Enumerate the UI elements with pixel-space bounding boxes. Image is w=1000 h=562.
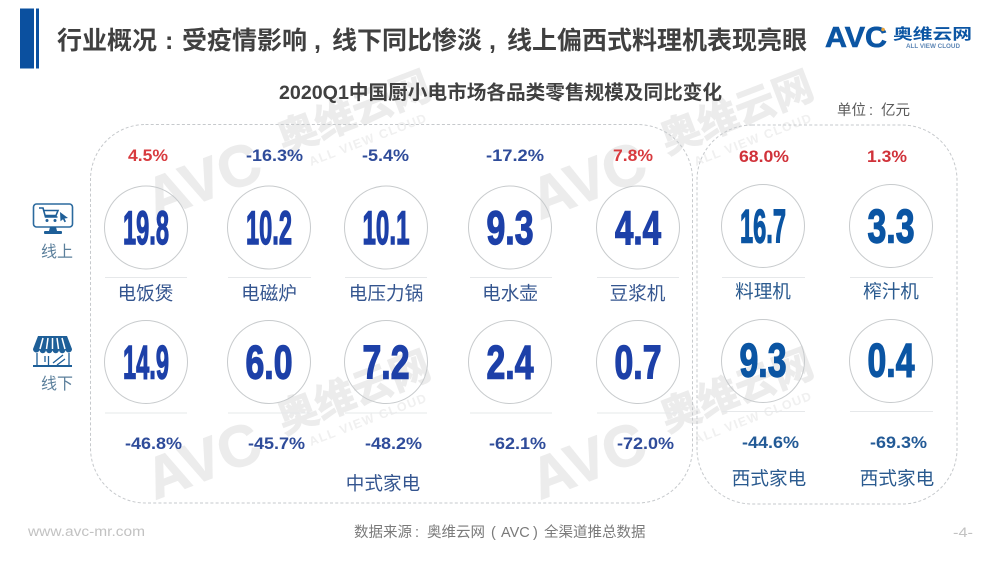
offline value: 电饭煲 <box>104 320 188 404</box>
offline value: 电水壶 <box>468 320 552 404</box>
online value: 豆浆机: 4.4 <box>615 202 661 255</box>
online value: 电水壶 <box>468 186 552 269</box>
offline growth: 电磁炉 <box>228 413 311 453</box>
category: 电压力锅: 电压力锅 <box>349 283 423 304</box>
online value: 豆浆机 <box>596 186 680 269</box>
title: : <box>165 27 173 55</box>
online value: 榨汁机: 3.3 <box>868 200 914 254</box>
logo: AVC all view cloud: 奥维云网 <box>893 25 972 43</box>
offline value: 榨汁机: 0.4 <box>868 334 915 388</box>
watermark: top right: ALL VIEW CLOUD <box>692 111 814 169</box>
logo: AVC all view cloud: AVC <box>825 22 887 54</box>
group label: chinese appliances: 中式家电 <box>346 473 420 494</box>
offline value: 电饭煲: 14.9 <box>123 336 169 390</box>
offline value: 电磁炉: 6.0 <box>246 336 292 390</box>
title accent bars <box>20 8 39 68</box>
chart title: 2020Q1中国厨小电市场各品类零售规模及同比变化 <box>279 81 722 104</box>
online growth: 电水壶: -17.2% <box>486 147 544 165</box>
unit label: 单位 <box>837 102 866 119</box>
watermark: top left: 奥维云网 <box>271 64 437 162</box>
online value: 电磁炉 <box>228 186 310 269</box>
offline growth: 电压力锅: -48.2% <box>365 435 422 453</box>
page number: -4- <box>953 524 973 540</box>
watermark: bottom left: AVC <box>136 409 270 512</box>
watermark: top left: AVC <box>136 129 270 232</box>
online value: 电饭煲 <box>104 186 188 269</box>
offline growth: 豆浆机: -72.0% <box>617 435 674 453</box>
watermark: top right: 奥维云网 <box>654 64 820 162</box>
offline growth: 电磁炉: -45.7% <box>248 435 305 453</box>
title: , <box>314 27 321 55</box>
watermark: top left <box>136 64 437 232</box>
online growth: 电饭煲: 4.5% <box>128 147 168 165</box>
offline growth: 电水壶: -62.1% <box>489 435 546 453</box>
online value: 料理机 <box>722 184 804 268</box>
offline value: 料理机: 9.3 <box>740 334 786 388</box>
offline growth: 料理机: -44.6% <box>742 434 799 452</box>
online growth: 电压力锅: -5.4% <box>362 147 409 165</box>
offline growth: 电压力锅 <box>345 413 427 453</box>
online growth: 豆浆机: 7.8% <box>613 147 653 165</box>
offline value: 电压力锅 <box>344 320 428 404</box>
offline value: 豆浆机 <box>596 320 680 404</box>
watermark: bottom left: 奥维云网 <box>271 344 437 442</box>
channel: online <box>34 204 73 261</box>
title: 受疫情影响 <box>182 27 307 55</box>
source note: 奥维云网 <box>427 524 485 541</box>
online value: 电压力锅: 10.1 <box>362 202 410 255</box>
watermark: bottom right: ALL VIEW CLOUD <box>692 389 814 447</box>
category: 电磁炉: 电磁炉 <box>241 283 297 304</box>
category: 榨汁机 <box>850 278 933 302</box>
online growth: 料理机: 68.0% <box>739 148 789 166</box>
category: 电水壶: 电水壶 <box>482 283 538 304</box>
watermark: top right: AVC <box>521 129 655 232</box>
category: 电水壶 <box>470 278 552 304</box>
label: online: 线上 <box>41 243 73 261</box>
offline value: 豆浆机: 0.7 <box>614 336 662 390</box>
logo: AVC all view cloud <box>825 22 972 54</box>
group label: 榨汁机 western appliance: 西式家电 <box>860 468 934 489</box>
category: 榨汁机: 榨汁机 <box>863 281 919 302</box>
category: 豆浆机: 豆浆机 <box>610 283 666 304</box>
watermark: bottom right: 奥维云网 <box>654 342 820 440</box>
offline growth: 榨汁机: -69.3% <box>870 434 927 452</box>
category: 料理机 <box>722 278 805 302</box>
offline value: 榨汁机 <box>850 320 932 402</box>
category: 豆浆机 <box>597 278 679 304</box>
online value: 料理机: 16.7 <box>740 200 786 254</box>
logo: AVC all view cloud: ALL VIEW CLOUD <box>906 43 960 50</box>
source note: AVC <box>501 525 530 541</box>
icon: shopping cart on monitor <box>34 204 72 234</box>
watermark: top left: ALL VIEW CLOUD <box>307 111 429 169</box>
title: 线下同比惨淡 <box>332 27 482 55</box>
category: 料理机: 料理机 <box>735 281 791 302</box>
offline growth: 豆浆机 <box>597 413 679 453</box>
label: offline: 线下 <box>41 375 73 393</box>
watermark: bottom left <box>136 344 437 512</box>
offline value: 电磁炉 <box>228 320 310 404</box>
icon: storefront <box>33 336 72 367</box>
panel: western-style appliances <box>697 125 957 504</box>
title: 行业概况 <box>57 27 157 55</box>
title: , <box>489 27 496 55</box>
group label: 料理机 western appliance: 西式家电 <box>732 468 806 489</box>
source note: ( <box>491 525 496 541</box>
online growth: 榨汁机: 1.3% <box>867 148 907 166</box>
watermark: bottom left: ALL VIEW CLOUD <box>307 391 429 449</box>
online value: 电饭煲: 19.8 <box>123 202 169 255</box>
source note: : <box>415 525 419 541</box>
online growth: 电磁炉: -16.3% <box>246 147 303 165</box>
panel: chinese-style appliances <box>90 124 692 503</box>
watermark: bottom right: AVC <box>521 409 655 512</box>
unit label: : <box>869 103 873 119</box>
offline growth: 电饭煲 <box>105 413 187 453</box>
offline growth: 榨汁机 <box>850 412 933 452</box>
online value: 电压力锅 <box>344 186 428 269</box>
source note: 数据来源 <box>354 524 412 541</box>
watermark: bottom right <box>521 342 820 512</box>
source note: 全渠道推总数据 <box>544 523 646 541</box>
offline growth: 电饭煲: -46.8% <box>125 435 182 453</box>
watermark: top right <box>521 64 820 232</box>
footer url: www.avc-mr.com <box>27 524 145 539</box>
online value: 电磁炉: 10.2 <box>246 202 292 255</box>
offline growth: 电水壶 <box>470 413 552 453</box>
category: 电饭煲 <box>105 278 187 304</box>
offline value: 电水壶: 2.4 <box>486 336 534 390</box>
category: 电饭煲: 电饭煲 <box>118 283 173 304</box>
offline growth: 料理机 <box>722 412 805 452</box>
offline value: 料理机 <box>722 320 804 402</box>
channel: offline <box>33 336 73 393</box>
online value: 榨汁机 <box>850 184 932 268</box>
source note: ) <box>533 525 538 541</box>
title: 线上偏西式料理机表现亮眼 <box>507 27 807 55</box>
online value: 电水壶: 9.3 <box>486 202 534 255</box>
category: 电磁炉 <box>228 278 311 304</box>
unit label: 亿元 <box>881 102 910 119</box>
offline value: 电压力锅: 7.2 <box>362 336 410 390</box>
